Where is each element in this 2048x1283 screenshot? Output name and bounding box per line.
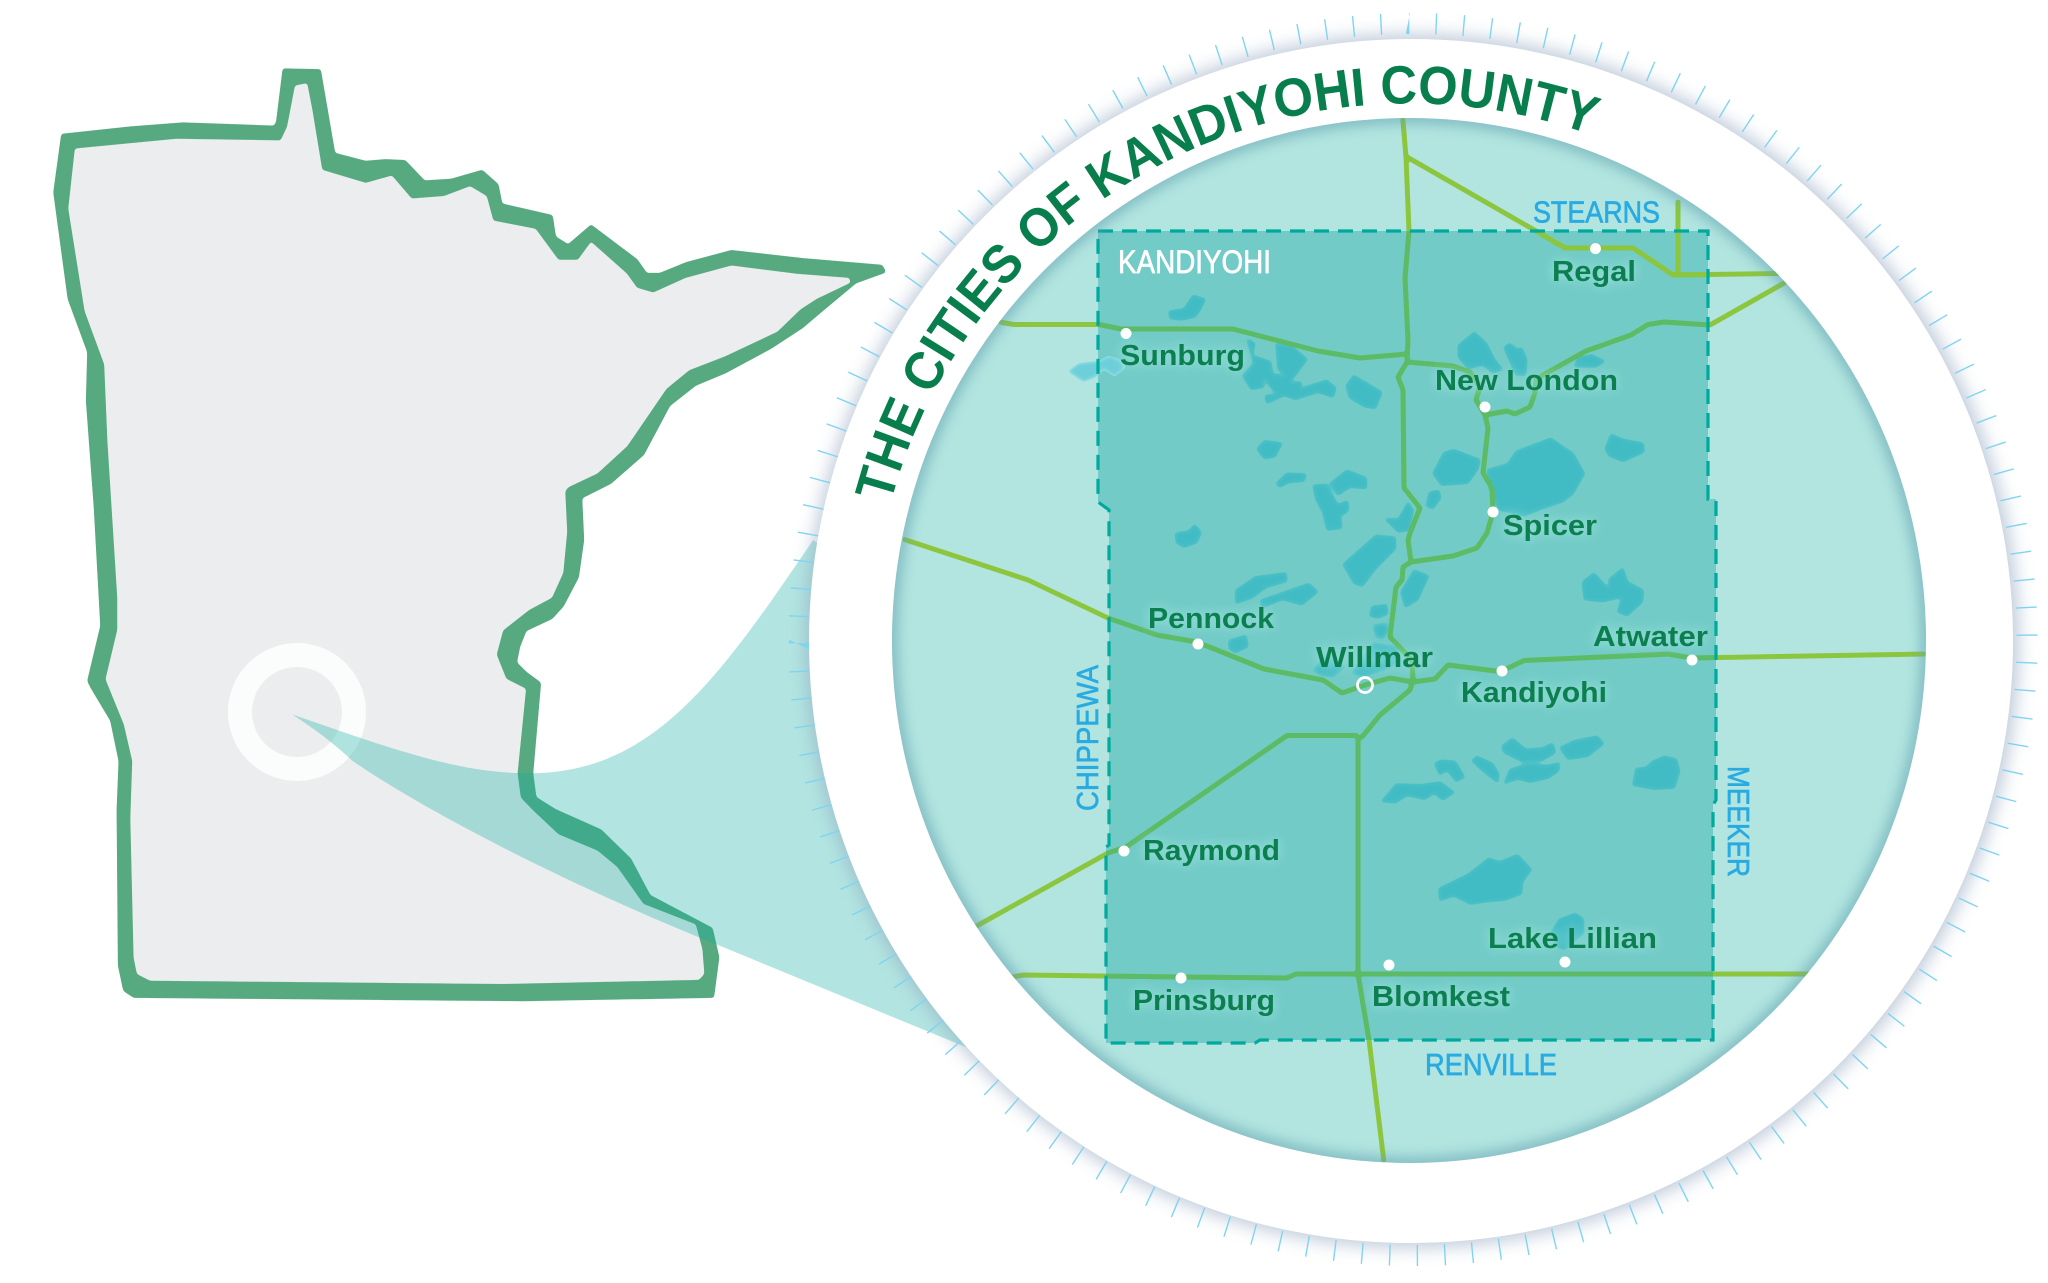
lakes (1068, 295, 1680, 950)
roads outside county (903, 118, 1926, 1162)
Willmar county-seat marker (1358, 678, 1372, 692)
city: Raymond: Raymond (1143, 835, 1280, 867)
city: Regal: Regal (1552, 256, 1636, 288)
roads inside county (1098, 231, 1716, 1040)
city: Willmar: Willmar (1316, 642, 1433, 674)
map disc (890, 116, 1928, 1165)
city: New London: New London (1435, 365, 1618, 397)
state fill (69, 83, 850, 984)
label: Meeker county: MEEKER (1721, 766, 1756, 877)
city: Kandiyohi: Kandiyohi (1461, 677, 1607, 709)
Minnesota state map (54, 70, 885, 1000)
inner edge shadow of map disc (890, 116, 1928, 1165)
label: Renville county: RENVILLE (1425, 1047, 1557, 1082)
zoom cone from state to map (292, 540, 980, 1047)
location ring on state (240, 655, 354, 769)
city: Pennock: Pennock (1148, 603, 1275, 635)
county names (1070, 194, 1756, 1082)
city: Blomkest: Blomkest (1372, 981, 1510, 1013)
label: Chippewa county: CHIPPEWA (1070, 665, 1105, 811)
city: Sunburg: Sunburg (1120, 340, 1245, 372)
circular frame (794, 18, 2032, 1261)
city: Atwater: Atwater (1593, 621, 1708, 653)
white ring (809, 39, 2013, 1243)
surrounding counties background (892, 118, 1926, 1163)
city: Lake Lillian: Lake Lillian (1488, 923, 1657, 955)
label: Stearns county: STEARNS (1533, 194, 1660, 230)
label: Kandiyohi county: KANDIYOHI (1118, 244, 1271, 280)
title: THE CITIES OF KANDIYOHI COUNTY (854, 66, 1602, 494)
city names (1120, 256, 1708, 1017)
city: Prinsburg: Prinsburg (1133, 985, 1275, 1017)
city: Spicer: Spicer (1503, 510, 1597, 542)
Kandiyohi county area (1098, 231, 1716, 1043)
tick marks (794, 18, 2032, 1261)
city markers (1118, 243, 1698, 984)
county dashed border (1098, 231, 1716, 1043)
state outline (54, 70, 885, 1000)
frame shadow (806, 35, 2018, 1247)
